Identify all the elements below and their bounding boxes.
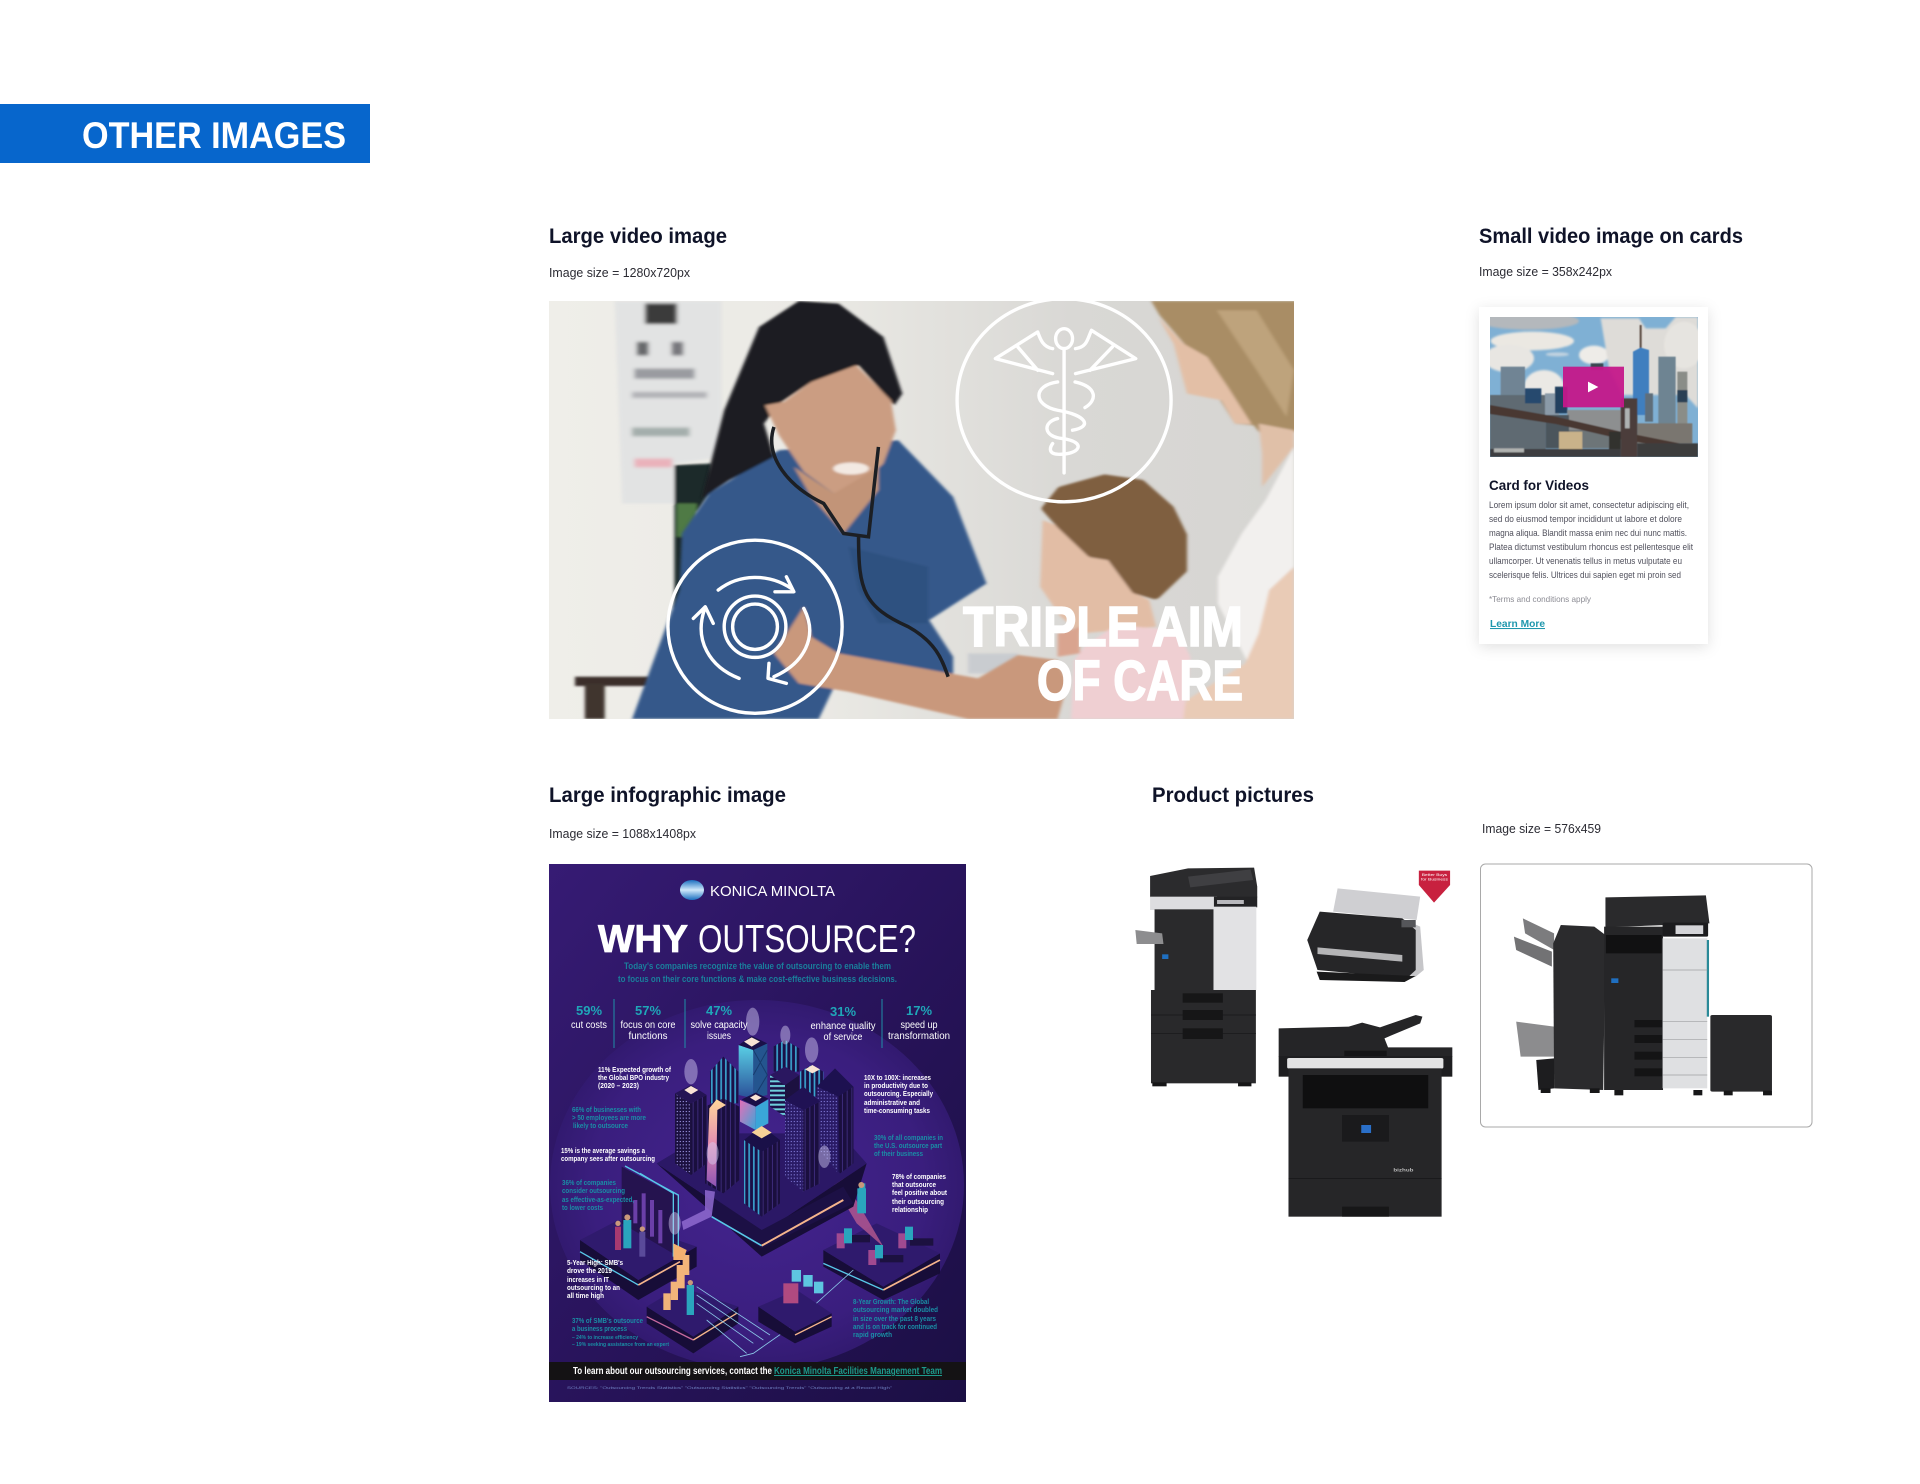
card body text bbox=[1489, 500, 1693, 581]
product: document scanner with award badge: for Business bbox=[1421, 877, 1448, 882]
card title: Card for Videos bbox=[1489, 478, 1589, 493]
callouts: left column: outsourcing to an bbox=[567, 1283, 620, 1292]
card image: city skyline with play button bbox=[1490, 317, 1698, 457]
callouts: left column: drove the 2019 bbox=[567, 1266, 612, 1275]
connector path bbox=[682, 1190, 715, 1230]
lower platforms with people bbox=[580, 1166, 940, 1357]
infographic title bbox=[598, 918, 916, 961]
panel: video card bbox=[1479, 307, 1708, 644]
callouts: left column: 15% is the average savings a bbox=[561, 1146, 646, 1155]
logo: konica minolta bbox=[680, 880, 835, 900]
card terms note: *Terms and conditions apply bbox=[1489, 594, 1592, 604]
callouts: left column: company sees after outsourcing bbox=[561, 1154, 655, 1163]
callouts: left column: – 19% seeking assistance from an expert bbox=[572, 1342, 669, 1348]
stats row: 31% bbox=[830, 1004, 856, 1019]
left towers bbox=[675, 1093, 691, 1175]
infographic subtitle: Today's companies recognize the value of outsourcing to enable them bbox=[624, 961, 891, 972]
child bbox=[1040, 520, 1156, 633]
photo: nurse with child, triple aim of care: OF CARE bbox=[1037, 649, 1243, 713]
icon: circular arrows in circle bbox=[668, 540, 842, 713]
logo: konica minolta: KONICA MINOLTA bbox=[710, 883, 835, 900]
infographic title: OUTSOURCE? bbox=[698, 918, 916, 961]
stats row: of service bbox=[824, 1032, 863, 1043]
callouts: left column: the Global BPO industry bbox=[598, 1073, 670, 1082]
stats row: 17% bbox=[906, 1003, 932, 1018]
nurse hair bbox=[702, 301, 902, 499]
caption: infographic size: Image size = 1088x1408px bbox=[549, 827, 697, 841]
callouts: left column: 11% Expected growth of bbox=[598, 1065, 671, 1074]
caption: product image size: Image size = 576x459 bbox=[1482, 822, 1601, 836]
heading: large video image: Large video image bbox=[549, 225, 727, 248]
nurse face bbox=[765, 365, 896, 494]
section banner: OTHER IMAGES: OTHER IMAGES bbox=[82, 115, 346, 156]
stats row: 59% bbox=[576, 1003, 602, 1018]
right front tower bbox=[785, 1100, 803, 1192]
heading: small video image on cards: Small video image on cards bbox=[1479, 225, 1743, 248]
callouts: left column: (2020 – 2023) bbox=[598, 1081, 639, 1090]
product images group bbox=[1135, 868, 1772, 1217]
card body text: sed do eiusmod tempor incididunt ut labore et dolore bbox=[1489, 514, 1682, 525]
stats row: 57% bbox=[635, 1003, 661, 1018]
callouts: left column: consider outsourcing bbox=[562, 1186, 625, 1195]
callouts: left column: a business process bbox=[572, 1324, 627, 1333]
card link: Learn More bbox=[1490, 618, 1545, 630]
photo: nurse with child, triple aim of care bbox=[549, 299, 1300, 719]
callouts: left column: 5-Year High: SMB's bbox=[567, 1258, 623, 1267]
callouts: right column: of their business bbox=[874, 1149, 923, 1158]
product: document scanner with award badge: Better Buys bbox=[1422, 873, 1447, 877]
contact bar bbox=[549, 1362, 966, 1380]
nurse arm bbox=[774, 607, 1068, 719]
callouts: right column: 78% of companies bbox=[892, 1172, 946, 1181]
bottom platforms bbox=[647, 1307, 738, 1353]
card body text: ullamcorper. Ut venenatis tellus in metus vulputate eu bbox=[1489, 556, 1682, 567]
centre front tower bbox=[744, 1140, 762, 1217]
callouts: left column: 66% of businesses with bbox=[572, 1105, 641, 1114]
stats row: 47% bbox=[706, 1003, 732, 1018]
callouts: right column: 8-Year Growth: The Global bbox=[853, 1297, 929, 1306]
right platform bbox=[823, 1250, 940, 1300]
heading: large infographic image: Large infographic image bbox=[549, 784, 786, 807]
stats row: functions bbox=[628, 1031, 668, 1042]
callouts: right column: 30% of all companies in bbox=[874, 1133, 943, 1142]
callouts: right column: outsourcing market doubled bbox=[853, 1305, 938, 1314]
callouts: left column: to lower costs bbox=[562, 1203, 603, 1212]
photo: nurse with child, triple aim of care: TRIPLE AIM bbox=[963, 595, 1243, 659]
infographic subtitle: to focus on their core functions & make cost-effective business decisions. bbox=[618, 974, 897, 985]
product: desktop multifunction printer bbox=[1279, 1015, 1452, 1217]
callouts: right column: administrative and bbox=[864, 1098, 920, 1107]
stats row: solve capacity bbox=[690, 1020, 748, 1031]
framed product image box bbox=[1480, 864, 1812, 1127]
infographic subtitle bbox=[618, 961, 897, 985]
stats row: cut costs bbox=[571, 1020, 607, 1031]
product: desktop multifunction printer: bizhub bbox=[1393, 1168, 1414, 1173]
section banner: OTHER IMAGES bbox=[0, 104, 370, 163]
back towers bbox=[773, 1040, 799, 1072]
card body text: Lorem ipsum dolor sit amet, consectetur adipiscing elit, bbox=[1489, 500, 1689, 511]
icon: caduceus in circle bbox=[957, 299, 1171, 502]
infographic title: WHY bbox=[598, 918, 688, 961]
left platform bbox=[580, 1240, 697, 1300]
callouts: left column: all time high bbox=[567, 1291, 604, 1300]
card body text: magna aliqua. Blandit massa enim nec dui nunc mattis. bbox=[1489, 528, 1687, 539]
stats row: enhance quality bbox=[810, 1021, 876, 1032]
callouts: right column: feel positive about bbox=[892, 1188, 947, 1197]
infographic thumbnail: why outsource bbox=[549, 864, 966, 1402]
callouts: right column: in size over the past 8 years bbox=[853, 1314, 936, 1323]
callouts: left column: 36% of companies bbox=[562, 1178, 616, 1187]
callouts: right column bbox=[853, 1073, 947, 1339]
callouts: right column: in productivity due to bbox=[864, 1081, 928, 1090]
stethoscope bbox=[772, 427, 948, 677]
callouts: left column: 37% of SMB's outsource bbox=[572, 1316, 643, 1325]
card body text: Platea dictumst vestibulum rhoncus est pellentesque elit bbox=[1489, 542, 1693, 553]
callouts: right column: relationship bbox=[892, 1205, 928, 1214]
glow beacons bbox=[669, 1008, 830, 1235]
product: tall copier bbox=[1135, 868, 1257, 1086]
callouts: left column: – 24% to increase efficiency bbox=[572, 1335, 639, 1341]
stats row: speed up bbox=[900, 1020, 938, 1031]
heading: product pictures: Product pictures bbox=[1152, 784, 1314, 807]
caption: large video image size: Image size = 1280x720px bbox=[549, 266, 691, 280]
product: copier with finisher and paper cabinet bbox=[1514, 895, 1772, 1095]
callouts: left column: increases in IT bbox=[567, 1275, 609, 1284]
card body text: scelerisque felis. Ultrices dui sapien eget mi proin sed bbox=[1489, 570, 1681, 581]
callouts: right column: the U.S. outsource part bbox=[874, 1141, 942, 1150]
sources line: SOURCES: "Outsourcing Trends Statistics" "Outsourcing Statistics" "Outsourcing Trends" "Outsourcing at a Record High" bbox=[567, 1386, 892, 1390]
caption: small video image size: Image size = 358x242px bbox=[1479, 265, 1613, 279]
callouts: right column: and is on track for continued bbox=[853, 1322, 937, 1331]
callouts: right column: outsourcing. Especially bbox=[864, 1089, 934, 1098]
callouts: left column: likely to outsource bbox=[573, 1121, 628, 1130]
callouts: left column: as effective-as-expected, bbox=[562, 1195, 634, 1204]
callouts: left column bbox=[561, 1065, 671, 1348]
stats row: transformation bbox=[888, 1031, 950, 1042]
callouts: right column: their outsourcing bbox=[892, 1197, 944, 1206]
stats row: focus on core bbox=[620, 1020, 676, 1031]
callouts: right column: 10X to 100X: increases bbox=[864, 1073, 931, 1082]
product: document scanner with award badge bbox=[1307, 871, 1450, 982]
isometric city illustration bbox=[640, 1008, 867, 1260]
stats row: issues bbox=[707, 1031, 731, 1042]
contact bar: To learn about our outsourcing services, contact the bbox=[573, 1366, 772, 1377]
stats row bbox=[571, 999, 950, 1048]
middle pink tower bbox=[740, 1100, 756, 1130]
callouts: right column: rapid growth bbox=[853, 1330, 892, 1339]
callouts: left column: > 50 employees are more bbox=[572, 1113, 646, 1122]
callouts: right column: that outsource bbox=[892, 1180, 936, 1189]
callouts: right column: time-consuming tasks bbox=[864, 1106, 930, 1115]
mother bbox=[1151, 301, 1300, 460]
nurse scrubs bbox=[632, 440, 986, 719]
